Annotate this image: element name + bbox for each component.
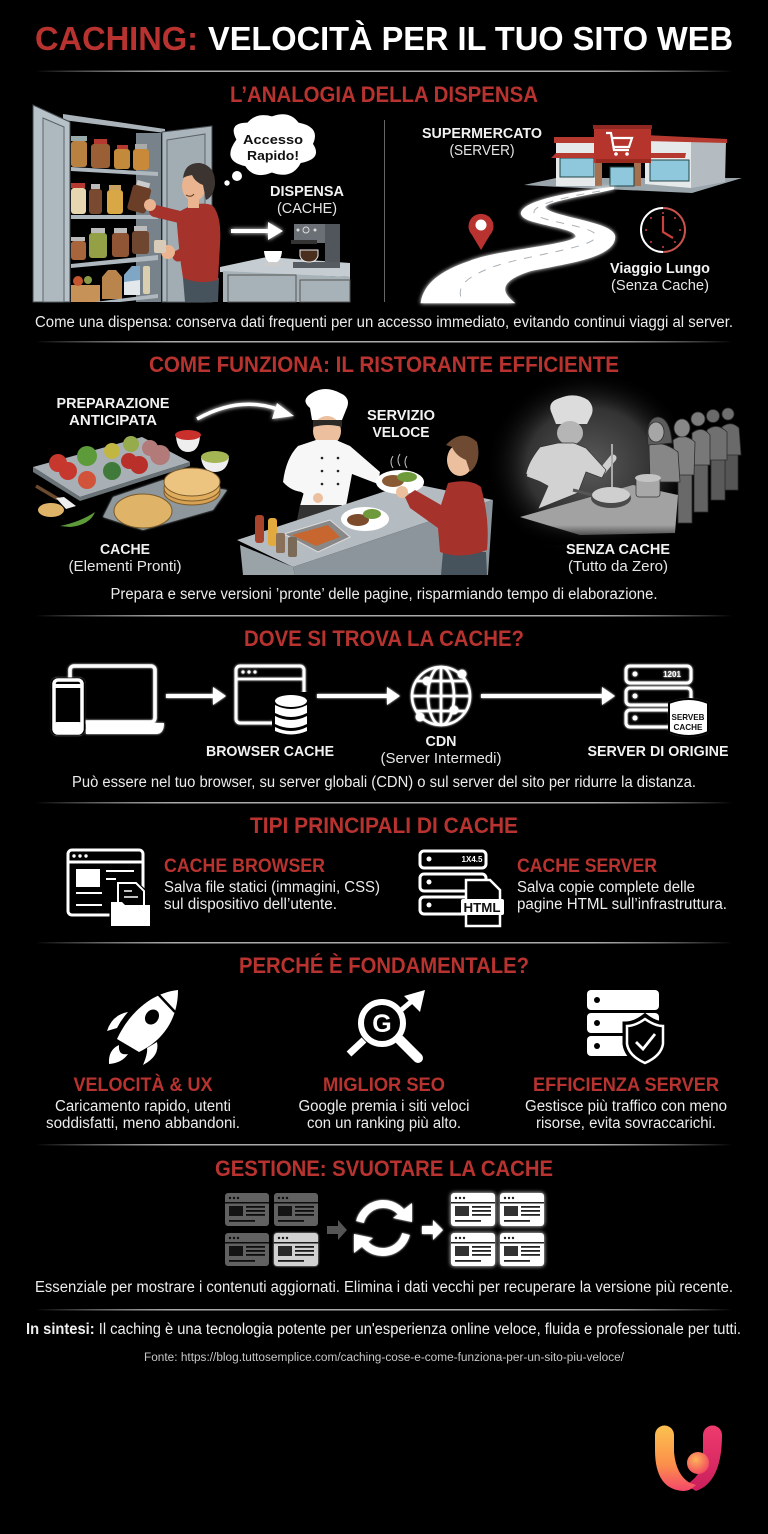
callout: thought bubble bbox=[224, 114, 316, 186]
text: velocità: Caricamento rapido, utenti bbox=[55, 1098, 231, 1115]
icon: browser with files bbox=[68, 850, 150, 926]
heading: gestione: GESTIONE: SVUOTARE LA CACHE bbox=[215, 1156, 553, 1181]
text: come funziona description: Prepara e serve versioni ’pronte’ delle pagine, risparmiando tempo di elaborazione. bbox=[110, 586, 658, 603]
text: seo: con un ranking più alto. bbox=[307, 1115, 461, 1132]
illustration: customer bbox=[396, 436, 488, 575]
icon: server with html: 1X4.5 bbox=[462, 855, 483, 864]
heading: analogia: L’ANALOGIA DELLA DISPENSA bbox=[230, 82, 538, 107]
text: cache server bbox=[517, 855, 727, 913]
text: seo: Google premia i siti veloci bbox=[298, 1098, 470, 1115]
icon: origin server bbox=[626, 666, 708, 736]
panel: dove si trova la cache bbox=[52, 626, 729, 791]
text: gestione description: Essenziale per mostrare i contenuti aggiornati. Elimina i dati vecchi per recuperare la versione più recente. bbox=[35, 1279, 733, 1296]
text: velocità: VELOCITÀ & UX bbox=[74, 1073, 212, 1096]
text: seo bbox=[298, 1074, 470, 1132]
label: supermercato: SUPERMERCATO bbox=[422, 126, 542, 142]
text: cache server: Salva copie complete delle bbox=[517, 879, 695, 896]
icon: origin server: SERVEB bbox=[672, 712, 704, 722]
panel: come funziona bbox=[33, 352, 741, 603]
label: viaggio lungo: Viaggio Lungo bbox=[610, 261, 710, 277]
text: cache server: pagine HTML sull’infrastruttura. bbox=[517, 896, 727, 913]
icon: seo magnifier: G bbox=[372, 1010, 392, 1038]
text: efficienza server bbox=[525, 1074, 727, 1132]
label: viaggio lungo: (Senza Cache) bbox=[611, 278, 709, 294]
heading: come funziona: COME FUNZIONA: IL RISTORANTE EFFICIENTE bbox=[149, 352, 619, 377]
illustration: pantry bbox=[33, 105, 212, 302]
text: cache browser: sul dispositivo dell’utente. bbox=[164, 896, 337, 913]
icon: clock bbox=[641, 208, 685, 252]
icon: fresh pages bbox=[451, 1193, 544, 1266]
illustration: person at pantry bbox=[144, 163, 220, 302]
label: cdn: (Server Intermedi) bbox=[380, 751, 502, 767]
label: cdn: CDN bbox=[426, 734, 456, 750]
label: cdn bbox=[380, 734, 502, 767]
label: supermercato bbox=[422, 126, 542, 159]
panel: analogia della dispensa bbox=[33, 82, 742, 331]
heading: perché: PERCHÉ È FONDAMENTALE? bbox=[239, 953, 529, 978]
icon: origin server: CACHE bbox=[674, 722, 703, 732]
illustration: chef and counter bbox=[237, 389, 493, 575]
label: viaggio lungo bbox=[610, 261, 710, 294]
icon: stale pages bbox=[225, 1193, 318, 1266]
arrow: devices to browser bbox=[166, 687, 226, 705]
title: CACHING: bbox=[35, 20, 198, 57]
label: senza cache: SENZA CACHE bbox=[566, 542, 670, 558]
heading: tipi principali: TIPI PRINCIPALI DI CACHE bbox=[250, 813, 518, 838]
label: supermercato: (SERVER) bbox=[450, 143, 514, 159]
label: cache elementi pronti bbox=[68, 542, 182, 575]
label: browser cache: BROWSER CACHE bbox=[206, 744, 334, 760]
text: efficienza server: risorse, evita sovraccarichi. bbox=[536, 1115, 716, 1132]
panel: perché è fondamentale bbox=[46, 953, 727, 1132]
logo bbox=[655, 1426, 722, 1491]
icon: origin server: 1201 bbox=[663, 670, 681, 679]
text: summary: In sintesi: Il caching è una tecnologia potente per un'esperienza online veloce, fluida e professionale per tutti. bbox=[26, 1321, 741, 1338]
icon: devices bbox=[52, 666, 164, 734]
icon: rocket bbox=[107, 990, 178, 1065]
queue person 3 bbox=[691, 412, 710, 512]
queue person 1 bbox=[647, 417, 680, 482]
panel: tipi principali di cache bbox=[68, 813, 727, 926]
arrow: curved arrow to chef bbox=[197, 403, 294, 419]
text: velocità: soddisfatti, meno abbandoni. bbox=[46, 1115, 240, 1132]
queue person 5 bbox=[722, 408, 741, 490]
queue person 4 bbox=[706, 410, 727, 500]
icon: server with html: HTML bbox=[464, 900, 501, 915]
label: server di origine: SERVER DI ORIGINE bbox=[588, 744, 729, 760]
illustration: road bbox=[422, 188, 614, 302]
icon: cdn globe bbox=[412, 667, 470, 725]
illustration: prepared ingredients bbox=[33, 430, 229, 530]
panel: gestione svuotare la cache bbox=[35, 1156, 733, 1296]
illustration: stressed chef without cache bbox=[485, 370, 741, 560]
icon: server with html bbox=[420, 851, 504, 926]
label: servizio veloce: VELOCE bbox=[372, 425, 430, 441]
text: velocità bbox=[46, 1073, 240, 1132]
text: source: Fonte: https://blog.tuttosemplice.com/caching-cose-e-come-funziona-per-un-sito-piu-veloce/ bbox=[144, 1352, 625, 1364]
label: servizio veloce bbox=[367, 408, 435, 441]
arrow: cdn to server bbox=[481, 687, 615, 705]
text: efficienza server: EFFICIENZA SERVER bbox=[533, 1074, 719, 1096]
text: cache browser: Salva file statici (immagini, CSS) bbox=[164, 879, 380, 896]
arrow: dim arrow bbox=[327, 1220, 347, 1240]
icon: seo magnifier bbox=[349, 990, 425, 1058]
text: cache server: CACHE SERVER bbox=[517, 855, 657, 877]
label: dispensa: DISPENSA bbox=[270, 184, 345, 200]
arrow: white arrow bbox=[422, 1220, 443, 1240]
icon: browser cache bbox=[236, 666, 311, 740]
illustration: supermarket bbox=[524, 125, 742, 193]
text: seo: MIGLIOR SEO bbox=[323, 1074, 445, 1096]
arrow: browser to cdn bbox=[317, 687, 400, 705]
text: cache browser: CACHE BROWSER bbox=[164, 855, 325, 877]
heading: dove si trova: DOVE SI TROVA LA CACHE? bbox=[244, 626, 524, 651]
label: servizio veloce: SERVIZIO bbox=[367, 408, 435, 424]
text: dove description: Può essere nel tuo browser, su server globali (CDN) o sul server del sito per ridurre la distanza. bbox=[72, 774, 696, 791]
label: preparazione anticipata: PREPARAZIONE bbox=[56, 396, 170, 412]
title: VELOCITÀ PER IL TUO SITO WEB bbox=[208, 20, 733, 57]
label: dispensa: (CACHE) bbox=[277, 201, 337, 217]
label: dispensa bbox=[270, 184, 345, 217]
label: senza cache bbox=[566, 542, 670, 575]
icon: refresh bbox=[354, 1203, 412, 1253]
text: efficienza server: Gestisce più traffico con meno bbox=[525, 1098, 727, 1115]
label: preparazione anticipata: ANTICIPATA bbox=[69, 413, 158, 429]
icon: server shield bbox=[587, 990, 665, 1066]
label: preparazione anticipata bbox=[56, 396, 170, 429]
illustration: counter and coffee machine bbox=[220, 224, 350, 302]
callout: thought bubble: Accesso bbox=[243, 132, 303, 147]
label: senza cache: (Tutto da Zero) bbox=[568, 559, 668, 575]
callout: thought bubble: Rapido! bbox=[247, 148, 299, 163]
label: cache elementi pronti: (Elementi Pronti) bbox=[68, 559, 182, 575]
queue person 2 bbox=[673, 419, 695, 523]
icon: location pin bbox=[468, 214, 493, 250]
text: cache browser bbox=[164, 855, 380, 913]
text: analogia description: Come una dispensa: conserva dati frequenti per un accesso immediato, evitando continui viaggi al server. bbox=[35, 314, 733, 331]
arrow: to coffee machine bbox=[231, 222, 283, 240]
label: cache elementi pronti: CACHE bbox=[100, 542, 150, 558]
